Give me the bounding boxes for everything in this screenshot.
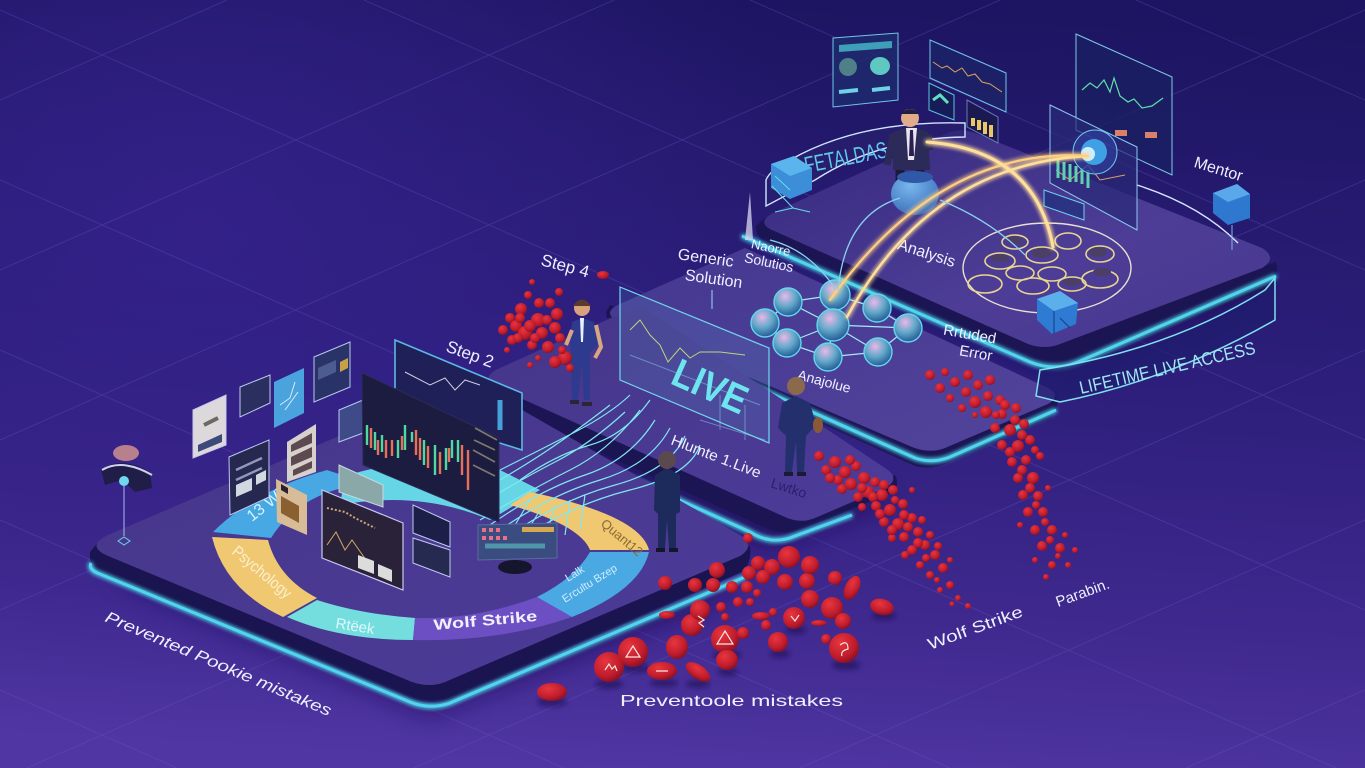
floor shadows <box>110 200 1260 715</box>
text: parabin: Parabin. <box>1054 576 1112 611</box>
panel: live chart: LIVE <box>665 351 754 423</box>
icon: puck <box>498 560 532 574</box>
dashboard: small scatter <box>929 83 954 120</box>
holographic lens <box>1073 130 1117 174</box>
card: heatmap dashboard <box>478 523 557 560</box>
token icons <box>605 615 848 671</box>
dashboard: front analytics <box>1044 105 1157 230</box>
token shadows <box>537 612 896 707</box>
middle platform surface <box>610 248 1055 451</box>
panel: lifetime live access banner <box>1036 278 1275 402</box>
text: hlumte 1.live: Hlumte 1.Live <box>669 432 763 482</box>
card: dark screen <box>240 375 270 417</box>
icon: front blue cube <box>1037 291 1078 334</box>
card: form <box>229 440 269 515</box>
card: blue sketch <box>274 368 304 428</box>
segment: quant <box>510 492 649 559</box>
lower-middle base <box>486 378 897 532</box>
text: prevented mistakes: Preventoole mistakes <box>620 693 843 710</box>
icon: left blue cube <box>771 156 812 212</box>
segment: top mint <box>340 461 540 520</box>
text: wolf strike: Wolf Strike <box>926 604 1025 654</box>
segment: 13 week <box>213 470 345 538</box>
upper platform neon rail <box>742 236 1276 367</box>
text: solutions: Solutios <box>743 249 795 275</box>
glowing arcs <box>830 142 1088 317</box>
lower platform surface <box>96 380 748 685</box>
figure: step 4 trader <box>566 300 601 406</box>
holographic arc: mentor side <box>1137 185 1238 243</box>
particle cluster: lower cascade <box>814 451 971 609</box>
segment: psychology <box>212 537 317 617</box>
lower platform neon rail <box>90 563 745 706</box>
text: analysis node label: Anajolue <box>796 366 853 396</box>
card: tan photo <box>276 479 307 535</box>
segment: risk: Rtëek <box>334 615 376 638</box>
panel: middle platform (generic solution tier) <box>606 192 1057 468</box>
upper platform base <box>756 218 1277 370</box>
network circle diagram <box>963 223 1131 313</box>
segment: quant: Quant12 <box>598 516 646 559</box>
card: back chart <box>395 340 522 450</box>
lower-middle surface <box>488 305 893 521</box>
node network <box>751 280 922 371</box>
dashboard: line chart <box>930 40 1006 112</box>
wheel: curriculum ring <box>212 461 649 640</box>
segment: execution: Ercultu Bzep <box>560 562 619 606</box>
dashboard: people metrics <box>833 33 898 107</box>
panel: floating dashboards <box>833 33 1172 230</box>
middle platform base <box>606 305 1057 468</box>
panel: lower-middle platform (steps tier) <box>486 305 897 540</box>
text: generic solution <box>677 246 743 309</box>
panel: live chart <box>620 287 769 443</box>
panel: floating chart cards <box>193 340 557 590</box>
middle platform neon rail <box>610 322 1056 461</box>
segment: wolf strike: Wolf Strike <box>433 608 538 634</box>
spike icon <box>745 192 753 240</box>
dashboard: bar chart <box>967 100 998 143</box>
particle cluster: step 4 <box>498 271 609 372</box>
panel: lifetime live access banner: LIFETIME LIVE ACCESS <box>1077 338 1257 398</box>
segment: execution <box>537 552 649 617</box>
card: photos stack <box>287 424 316 482</box>
text: solutions: Naorre <box>750 236 792 259</box>
icon: drone beacon <box>101 445 152 545</box>
lower-middle neon rail <box>520 428 852 540</box>
text: rtuded error: Error <box>958 342 994 365</box>
segment: psychology: Psychology <box>228 543 295 602</box>
segment: risk <box>287 600 415 640</box>
text: lwtko: Lwtko <box>769 475 809 501</box>
analysis label: Analysis <box>895 236 957 271</box>
card: paper report <box>193 395 226 458</box>
pale blue arcs <box>770 198 1025 290</box>
text: step 2: Step 2 <box>444 337 496 372</box>
card: landscape <box>339 465 383 507</box>
text: rtuded error: Rrtuded <box>942 322 998 348</box>
card: small photo <box>413 538 450 577</box>
particle cluster: right cascade <box>925 368 1078 580</box>
segment: wolf strike <box>413 597 572 640</box>
panel: upper platform (mentor tier) <box>742 131 1277 370</box>
red warning tokens <box>537 533 896 701</box>
text: generic solution: Generic <box>677 246 735 271</box>
card: trend chart <box>322 490 403 590</box>
icon: blue bowl <box>891 171 939 215</box>
text: generic solution: Solution <box>684 267 743 292</box>
card: main candlestick chart <box>362 373 499 522</box>
panel: lower platform (foundation tier) <box>90 380 750 720</box>
card: portrait <box>339 400 363 442</box>
figure: mentor <box>887 109 930 190</box>
figure: standing trader back view <box>778 377 823 476</box>
card: small qr <box>413 505 450 547</box>
figure: observer at lower platform <box>654 451 680 552</box>
card: photo grid <box>314 342 350 402</box>
holographic banner: dashboard <box>766 123 965 206</box>
segment: execution: Lalk <box>563 563 587 585</box>
text: rtuded error <box>942 322 998 365</box>
lower platform base <box>90 540 750 703</box>
text: mentor: Mentor <box>1192 154 1245 185</box>
text: solutions <box>743 236 795 275</box>
cyan data streams <box>465 395 700 540</box>
icon: right blue cube <box>1213 184 1250 250</box>
text: prevented rookie mistakes: Prevented Pookie mistakes <box>102 609 334 720</box>
holographic banner: dashboard: FETALDAS <box>802 136 889 178</box>
dashboard: large green chart <box>1076 34 1172 175</box>
text: step 4: Step 4 <box>539 251 591 282</box>
upper platform surface <box>764 131 1270 347</box>
segment: 13 week: 13 Wk <box>244 483 291 525</box>
